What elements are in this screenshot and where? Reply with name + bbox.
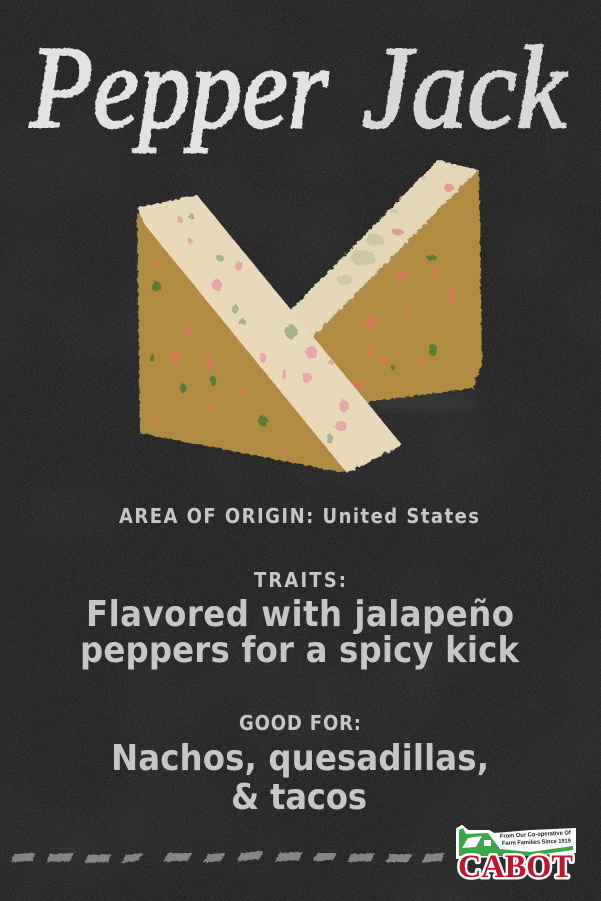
illustration: pepper jack cheese wedges (137, 160, 482, 473)
heading: traits: TRAITS: (254, 568, 346, 592)
text: good for description: & tacos (231, 777, 367, 818)
logo tagline: From Our Co-operative Of (500, 830, 572, 840)
text: good for description: Nachos, quesadillas, (111, 738, 489, 779)
icon: roof panel and window (462, 836, 491, 848)
logo tagline: Farm Families Since 1919 (502, 839, 572, 847)
chalk dashed line (11, 851, 445, 863)
title (29, 22, 568, 153)
text: traits description: peppers for a spicy kick (80, 630, 520, 671)
left wedge (137, 195, 402, 473)
right wedge (285, 160, 482, 402)
logo tagline (500, 830, 572, 847)
logo badge outline (457, 826, 575, 858)
text: area of origin: AREA OF ORIGIN: United States (119, 504, 479, 528)
logo wordmark: CABOT (458, 849, 573, 885)
logo: Cabot (457, 826, 575, 885)
icon: farmhouse and green banner (459, 828, 573, 856)
title: Jack (362, 22, 568, 153)
text: traits description: Flavored with jalapeño (86, 594, 514, 635)
heading: good for: GOOD FOR: (239, 711, 361, 735)
text: good for description (111, 738, 489, 818)
title: Pepper (29, 22, 329, 153)
text: traits description (80, 594, 520, 671)
